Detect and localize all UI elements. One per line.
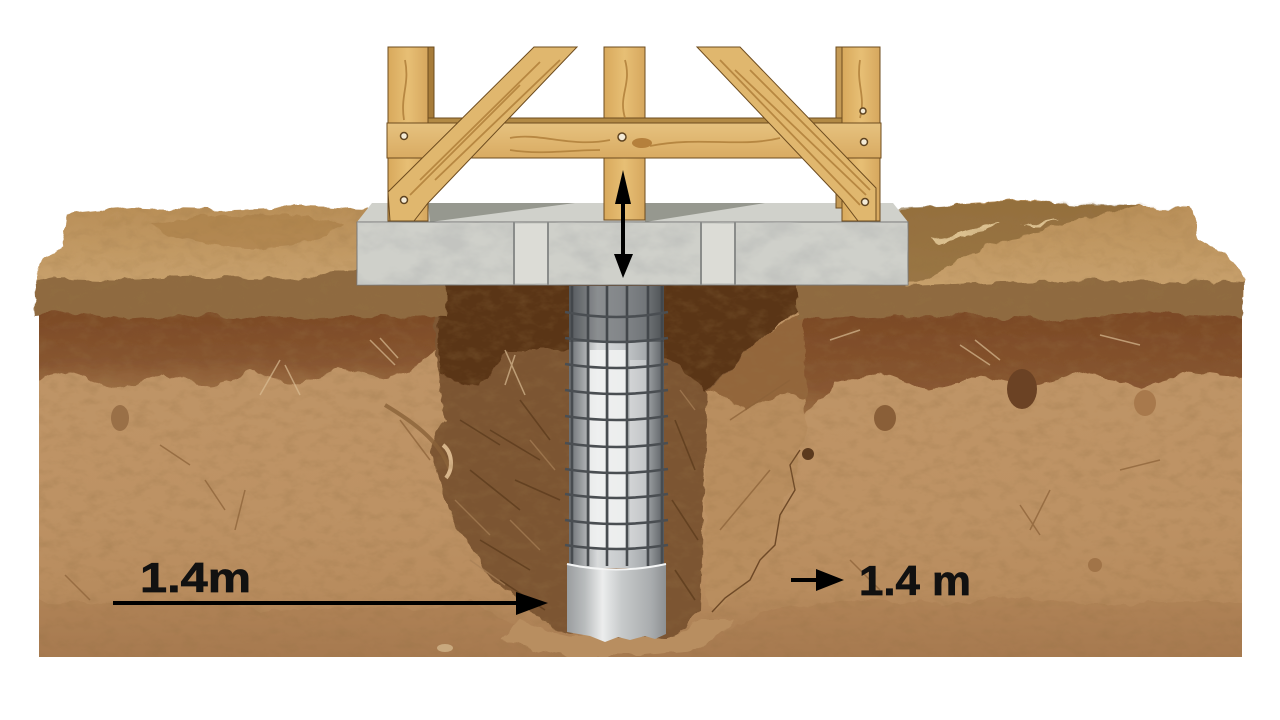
timber frame [387, 47, 881, 221]
post shadows on footing [428, 203, 575, 222]
steel casing [567, 564, 666, 642]
lower tan soil layer [39, 280, 1242, 657]
footing joints [514, 222, 735, 285]
left dimension label: 1.4m [140, 554, 251, 601]
left post [388, 47, 428, 221]
bolts [400, 108, 868, 206]
rail top edge [428, 118, 842, 124]
soil cross-section [39, 286, 1242, 657]
wedge upper dark tint [708, 312, 806, 410]
dark topsoil band, right [802, 311, 1242, 414]
light panels between bars [590, 350, 646, 550]
excavated pit: dark shadow at top [436, 286, 799, 392]
soil texture overlay [39, 286, 1242, 584]
reinforced pier [565, 286, 668, 642]
excavated pit: mid-brown backfill [430, 316, 772, 639]
horizontal rail [387, 123, 881, 158]
dark topsoil band, left [39, 310, 436, 388]
wedge outline [712, 450, 800, 612]
upper shadow of pier [569, 286, 664, 342]
ground surface: right [795, 200, 1244, 320]
vertical dimension arrow [614, 170, 633, 278]
footing panels [515, 224, 548, 283]
vertical rebar [572, 286, 662, 566]
left dimension label [113, 554, 548, 615]
root fibres [260, 330, 1140, 395]
pit right wedge of lighter soil [705, 319, 806, 420]
rebar hoops [565, 312, 668, 549]
pit fibres [460, 400, 698, 610]
ground surface: left [34, 208, 446, 320]
right dimension label: 1.4 m [859, 557, 971, 604]
left arrow [113, 592, 548, 615]
left brace [388, 47, 577, 221]
footing front face [357, 222, 908, 285]
left pit rim [385, 405, 450, 470]
footing top face [357, 203, 908, 222]
right post [842, 47, 880, 221]
concrete footing [357, 203, 908, 285]
right arrow [791, 569, 844, 591]
right brace [697, 47, 876, 221]
centre post [604, 47, 645, 220]
bottom soil shading [25, 596, 1255, 670]
wood grain [403, 60, 870, 205]
buried stones [111, 369, 1156, 652]
pit floor mound [500, 620, 735, 656]
right dimension label [791, 557, 971, 604]
pier core [569, 286, 664, 568]
